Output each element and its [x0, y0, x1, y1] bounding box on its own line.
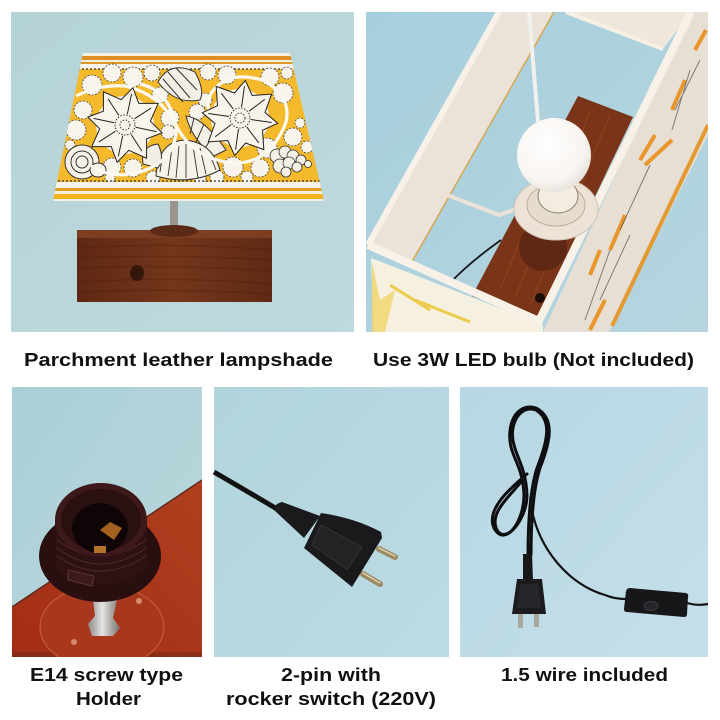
- icon: plug cable: [214, 472, 277, 509]
- decorative rims: [368, 12, 691, 321]
- icon: plug pins: [363, 548, 395, 584]
- caption: E14 holder: E14 screw type: [30, 664, 183, 685]
- panel: 2-pin plug photo: [214, 387, 449, 657]
- caption: 2-pin rocker switch: 2-pin with: [281, 664, 381, 685]
- icon: shell motif top: [158, 68, 202, 102]
- panel: bulb view into lampshade photo: [366, 12, 708, 332]
- caption: E14 holder: [30, 664, 183, 709]
- icon: rocker switch: [624, 588, 688, 617]
- icon: lamp harp rod: [448, 194, 514, 217]
- icon: wooden base seen from above: [472, 96, 633, 320]
- icon: shade left wall: [368, 12, 554, 267]
- caption: 2-pin rocker switch: rocker switch (220V): [226, 688, 436, 709]
- icon: metal stem: [88, 600, 120, 636]
- icon: lamp stem: [170, 200, 178, 228]
- icon: coiled wire: [492, 407, 549, 555]
- icon: yellow painted lampshade: [50, 53, 330, 202]
- caption: E14 holder: Holder: [76, 688, 141, 709]
- icon: bulb holder: [514, 178, 598, 240]
- icon: shade front wall: [371, 258, 543, 332]
- icon: screw holder: [39, 483, 161, 602]
- icon: shade top wall: [566, 12, 691, 49]
- icon: shell motif lower left: [65, 145, 106, 179]
- icon: outgoing cord: [687, 603, 708, 605]
- icon: plug body: [304, 513, 382, 587]
- caption: wire: 1.5 wire included: [501, 664, 668, 685]
- icon: shell motif centre: [186, 116, 226, 156]
- panel: wire with switch photo: [460, 387, 708, 657]
- icon: shell motif small: [143, 144, 162, 168]
- icon: vine: [76, 77, 287, 175]
- icon: fan motif: [156, 140, 220, 180]
- icon: lotus flower right: [202, 80, 278, 156]
- panel: parchment leather lampshade photo: [11, 12, 354, 332]
- caption: LED bulb: Use 3W LED bulb (Not included): [373, 349, 694, 370]
- icon: cord to switch: [531, 505, 626, 599]
- icon: lamp wooden base: [77, 225, 272, 302]
- icon: grape motif: [270, 146, 312, 177]
- icon: round wood plate: [40, 592, 164, 657]
- icon: black wire: [451, 240, 501, 282]
- icon: plug strain relief: [274, 502, 320, 538]
- leaf motifs: [65, 64, 313, 185]
- icon: shade right wall with orange pattern: [543, 12, 708, 332]
- icon: bulb cord: [529, 12, 538, 122]
- icon: small plug: [512, 554, 546, 628]
- caption: 2-pin rocker switch: [226, 664, 436, 709]
- icon: wood surface: [12, 480, 202, 657]
- panel: E14 holder photo: [12, 387, 202, 669]
- icon: LED bulb: [517, 118, 591, 192]
- caption: parchment leather lampshade: Parchment leather lampshade: [24, 349, 333, 370]
- icon: lotus flower left: [87, 87, 163, 164]
